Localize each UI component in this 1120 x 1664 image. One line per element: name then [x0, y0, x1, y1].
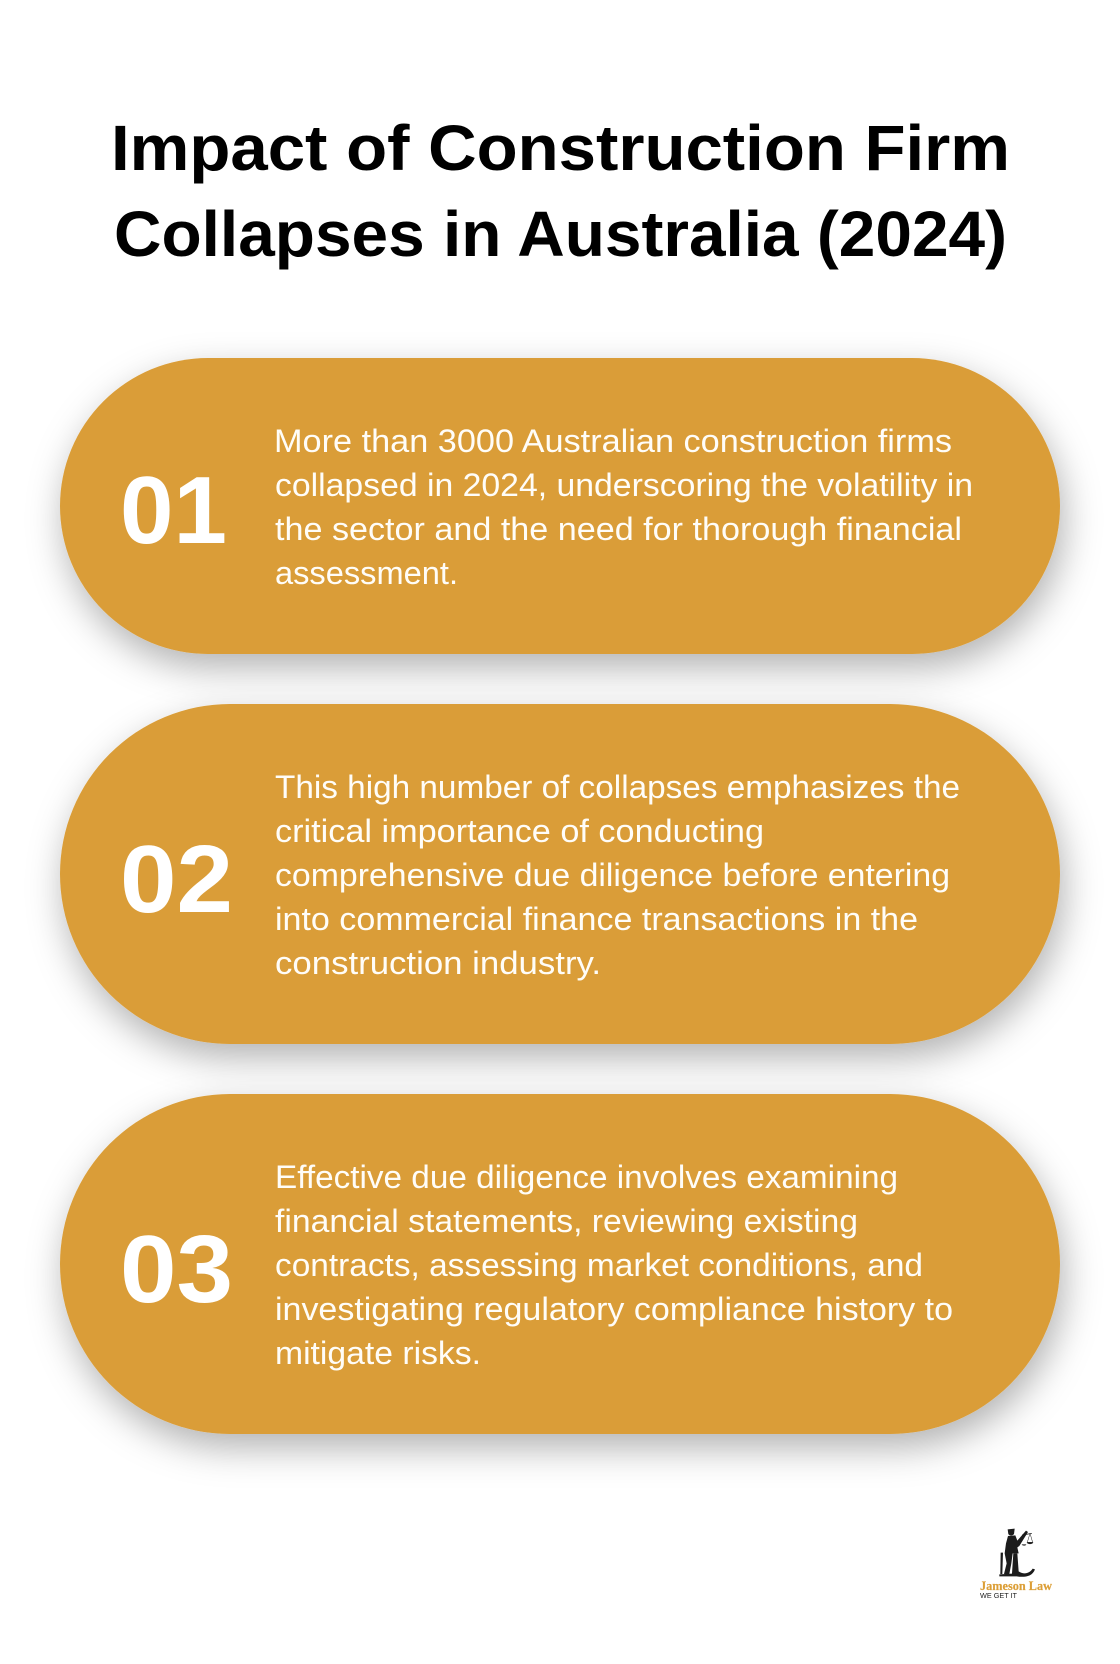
text block 03: mitigate risks. — [275, 1335, 481, 1371]
text block 01: assessment. — [275, 555, 458, 591]
panel: step 02 — [60, 704, 1060, 1044]
text block 02: This high number of collapses emphasizes the — [275, 769, 960, 805]
text block 03: contracts, assessing market conditions, and — [275, 1247, 923, 1283]
title: Collapses in Australia (2024) — [114, 198, 1007, 270]
text block 01: collapsed in 2024, underscoring the volatility in — [275, 467, 973, 503]
logo tagline: WE GET IT — [980, 1591, 1017, 1600]
panel: step 01 — [60, 358, 1060, 654]
title: Impact of Construction Firm — [111, 112, 1010, 184]
number 02: 02 — [120, 826, 233, 933]
number 03: 03 — [120, 1216, 233, 1323]
icon: lady justice — [999, 1529, 1035, 1577]
logo wordmark: Jameson Law — [980, 1579, 1052, 1593]
text block 02: construction industry. — [275, 945, 601, 981]
title — [111, 112, 1010, 270]
text block 02: critical importance of conducting — [275, 813, 764, 849]
pill background 02 — [60, 704, 1060, 1044]
text block 01: the sector and the need for thorough financial — [275, 511, 962, 547]
pill background 03 — [60, 1094, 1060, 1434]
text block 02 — [275, 769, 960, 981]
text block 02: comprehensive due diligence before entering — [275, 857, 950, 893]
logo: Jameson Law — [980, 1529, 1052, 1600]
text block 03: investigating regulatory compliance history to — [275, 1291, 953, 1327]
text block 03 — [275, 1159, 953, 1371]
text block 03: Effective due diligence involves examining — [275, 1159, 898, 1195]
number 01: 01 — [120, 457, 227, 564]
text block 01: More than 3000 Australian construction firms — [274, 423, 952, 459]
text block 03: financial statements, reviewing existing — [275, 1203, 858, 1239]
text block 02: into commercial finance transactions in the — [275, 901, 918, 937]
text block 01 — [274, 423, 973, 591]
panel: step 03 — [60, 1094, 1060, 1434]
pill background 01 — [60, 358, 1060, 654]
